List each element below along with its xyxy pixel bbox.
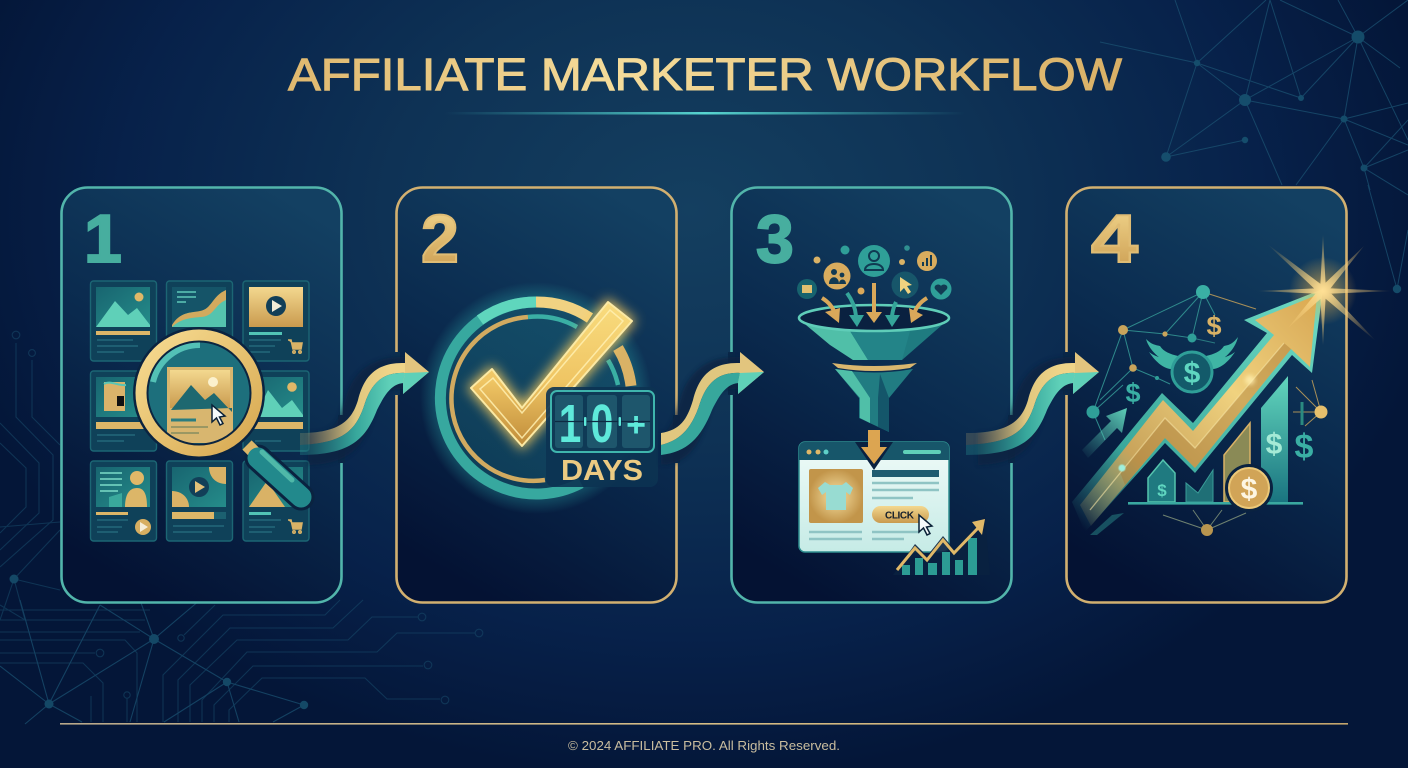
gold coin <box>1225 464 1273 512</box>
panel: step 2 ten plus days <box>396 188 676 602</box>
icon: cursor <box>919 515 932 535</box>
arrow: step 1 to step 2 <box>300 352 429 463</box>
panel: step 3 funnel <box>732 188 1012 602</box>
step number 2: 2 <box>421 201 459 277</box>
title underline <box>445 112 965 114</box>
arrow: step 2 to step 3 <box>661 352 764 463</box>
step number 4: 4 <box>1091 201 1138 277</box>
badge: 10+ counter: 0 <box>591 394 613 454</box>
dollar signs: $ <box>1125 378 1141 408</box>
dollar signs: $ <box>1295 428 1314 466</box>
sparkle on arrow tip <box>1118 235 1392 472</box>
gold coin: $ <box>1241 473 1258 506</box>
icon: cart <box>288 340 302 353</box>
content tile grid <box>90 281 309 541</box>
background circuit traces: bottom left <box>0 331 483 724</box>
icon: magnifying glass <box>133 327 301 497</box>
browser window: CLICK <box>885 510 915 522</box>
mini growth chart <box>893 515 990 575</box>
panel: step 1 browse offers <box>62 188 342 602</box>
winged coin <box>1146 337 1238 392</box>
badge: 10+ counter: 1 <box>559 394 581 454</box>
browser window <box>799 442 949 552</box>
bar chart: $ <box>1266 428 1283 461</box>
title: AFFILIATE MARKETER WORKFLOW <box>288 49 1123 100</box>
badge: 10+ counter <box>546 387 658 487</box>
product image <box>809 469 863 523</box>
network lines <box>1093 292 1321 530</box>
bar chart: $ <box>1157 481 1167 500</box>
arrow: step 3 to step 4 <box>966 352 1099 463</box>
funnel <box>798 305 950 432</box>
icon: check mark <box>471 302 632 446</box>
icon: cart <box>288 520 302 533</box>
background network: top right <box>1100 0 1408 293</box>
dollar signs <box>1125 311 1314 466</box>
icon: progress rings <box>420 282 652 514</box>
step number 3: 3 <box>756 201 794 277</box>
arrow down to page <box>855 430 893 470</box>
icons: audience sources <box>797 245 952 300</box>
dollar signs: $ <box>1206 311 1222 341</box>
footer divider <box>60 723 1348 725</box>
small rising arrow <box>1082 408 1127 458</box>
winged coin: $ <box>1184 357 1201 390</box>
rising zigzag arrow <box>1072 289 1323 535</box>
label: days: DAYS <box>561 455 643 487</box>
arrows into funnel <box>822 283 927 327</box>
badge: 10+ counter: + <box>626 406 646 444</box>
network nodes <box>1086 285 1328 536</box>
step number 1: 1 <box>84 201 122 277</box>
bar chart <box>1128 376 1303 505</box>
button: click <box>872 506 929 523</box>
footer text: © 2024 AFFILIATE PRO. All Rights Reserved. <box>568 739 840 753</box>
panel: step 4 revenue growth <box>1066 188 1392 602</box>
icon: cursor <box>212 405 225 425</box>
tile images <box>96 287 150 327</box>
